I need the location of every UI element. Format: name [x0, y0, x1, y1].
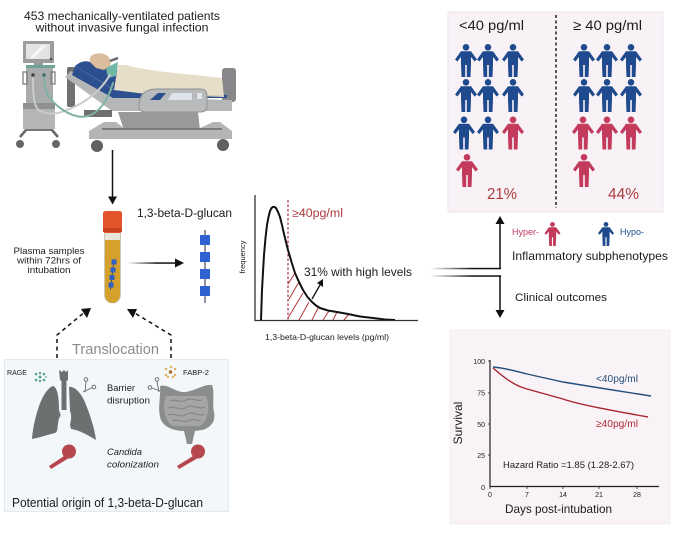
- text: plasma samples: Plasma samples: [14, 246, 85, 256]
- heading: potential origin: Potential origin of 1,3-beta-D-glucan: [12, 496, 203, 510]
- icon: scissors lung: [83, 378, 96, 392]
- icon: sample tube: [103, 211, 122, 303]
- panel: subphenotype proportions: [448, 12, 663, 212]
- text: candida colonization: colonization: [107, 460, 159, 470]
- icon: ventilator: [16, 41, 60, 148]
- text: candida colonization: Candida: [107, 447, 142, 458]
- icon: lungs: [32, 370, 96, 440]
- callout: 31%: 31% with high levels: [304, 265, 412, 279]
- threshold label: ≥40pg/ml: [292, 208, 343, 220]
- icon: candida right: [177, 444, 205, 469]
- arrow: patients to sample: [108, 150, 117, 204]
- text: barrier disruption: Barrier: [107, 383, 135, 394]
- icon: ventilator tubing: [33, 75, 113, 117]
- text: candida colonization: [107, 447, 159, 470]
- icon: glucan chain: [200, 230, 210, 303]
- arrow: to clinical outcomes: [430, 275, 504, 318]
- label: inflammatory subphenotypes: Inflammatory subphenotypes: [512, 249, 668, 263]
- axes: [490, 360, 659, 486]
- label: high group: ≥40pg/ml: [596, 418, 638, 430]
- arrowhead: right translocation: [127, 309, 137, 318]
- y axis title: Survival: [451, 402, 465, 444]
- hazard ratio: Hazard Ratio =1.85 (1.28-2.67): [503, 460, 634, 471]
- value: 21%: 21%: [487, 186, 517, 203]
- x tick labels: [488, 492, 641, 499]
- pictogram: high group: [572, 44, 642, 187]
- legend: hyper and hypo: [512, 222, 644, 246]
- icon: scissors gut: [148, 378, 160, 392]
- arrow: to high levels: [312, 279, 323, 299]
- text: barrier disruption: disruption: [107, 396, 150, 406]
- arrowhead: left translocation: [81, 308, 91, 318]
- x axis label: 1,3-beta-D-glucan levels (pg/ml): [265, 332, 389, 342]
- panel: survival chart: [450, 330, 670, 524]
- title: 453 mechanically-ventilated patients: [24, 9, 220, 23]
- hatched area: [288, 273, 349, 320]
- threshold line: [287, 200, 289, 321]
- arrow: to inflammatory subphenotypes: [430, 216, 504, 269]
- chart: frequency distribution: [238, 195, 418, 342]
- curve: high group: [493, 368, 648, 417]
- axes: [255, 195, 418, 320]
- icon: FABP-2 particles: [165, 366, 176, 378]
- x tick labels: 14: [559, 492, 567, 499]
- curve: low group: [493, 367, 651, 396]
- icon: intestine: [159, 385, 214, 444]
- legend: hyper and hypo: Hyper-: [512, 227, 539, 238]
- y tick labels: 75: [477, 390, 485, 398]
- label: FABP-2: FABP-2: [183, 368, 209, 377]
- x tick labels: 7: [525, 492, 529, 499]
- y tick labels: 50: [477, 422, 485, 429]
- x tick labels: 28: [633, 492, 641, 499]
- x tick labels: 0: [488, 492, 492, 499]
- arrow: sample to glucan: [127, 258, 184, 268]
- y axis label: frequency: [238, 240, 247, 273]
- label: RAGE: RAGE: [7, 368, 27, 377]
- title: without invasive fungal infection: [34, 20, 209, 34]
- x axis title: Days post-intubation: [505, 502, 612, 516]
- icon: RAGE particles: [35, 372, 47, 382]
- distribution curve: [261, 207, 395, 320]
- heading: low group: <40 pg/ml: [459, 17, 524, 33]
- text: plasma samples: intubation: [28, 265, 70, 275]
- text: plasma samples: within 72hrs of: [16, 256, 81, 266]
- label: clinical outcomes: Clinical outcomes: [515, 292, 608, 304]
- legend: hyper and hypo: Hypo-: [620, 227, 644, 238]
- title: [24, 9, 220, 34]
- y tick labels: 0: [481, 485, 485, 492]
- label: 1,3-beta-D-glucan: 1,3-beta-D-glucan: [137, 208, 232, 220]
- y tick labels: [473, 359, 485, 492]
- label: low group: <40pg/ml: [596, 373, 638, 385]
- pictogram: low group: [453, 44, 524, 187]
- y tick labels: 100: [473, 359, 485, 366]
- arrows: translocation dashed: [57, 311, 171, 358]
- icon: hospital bed with patient: [65, 53, 236, 152]
- label: translocation: Translocation: [72, 341, 159, 358]
- heading: high group: ≥ 40 pg/ml: [573, 17, 642, 33]
- panel: potential origin: [4, 360, 228, 512]
- text: barrier disruption: [107, 383, 150, 406]
- text: plasma samples: [14, 246, 85, 275]
- x tick labels: 21: [595, 492, 603, 499]
- value: 44%: 44%: [608, 186, 639, 203]
- y tick labels: 25: [477, 453, 485, 460]
- icon: candida left: [49, 444, 76, 469]
